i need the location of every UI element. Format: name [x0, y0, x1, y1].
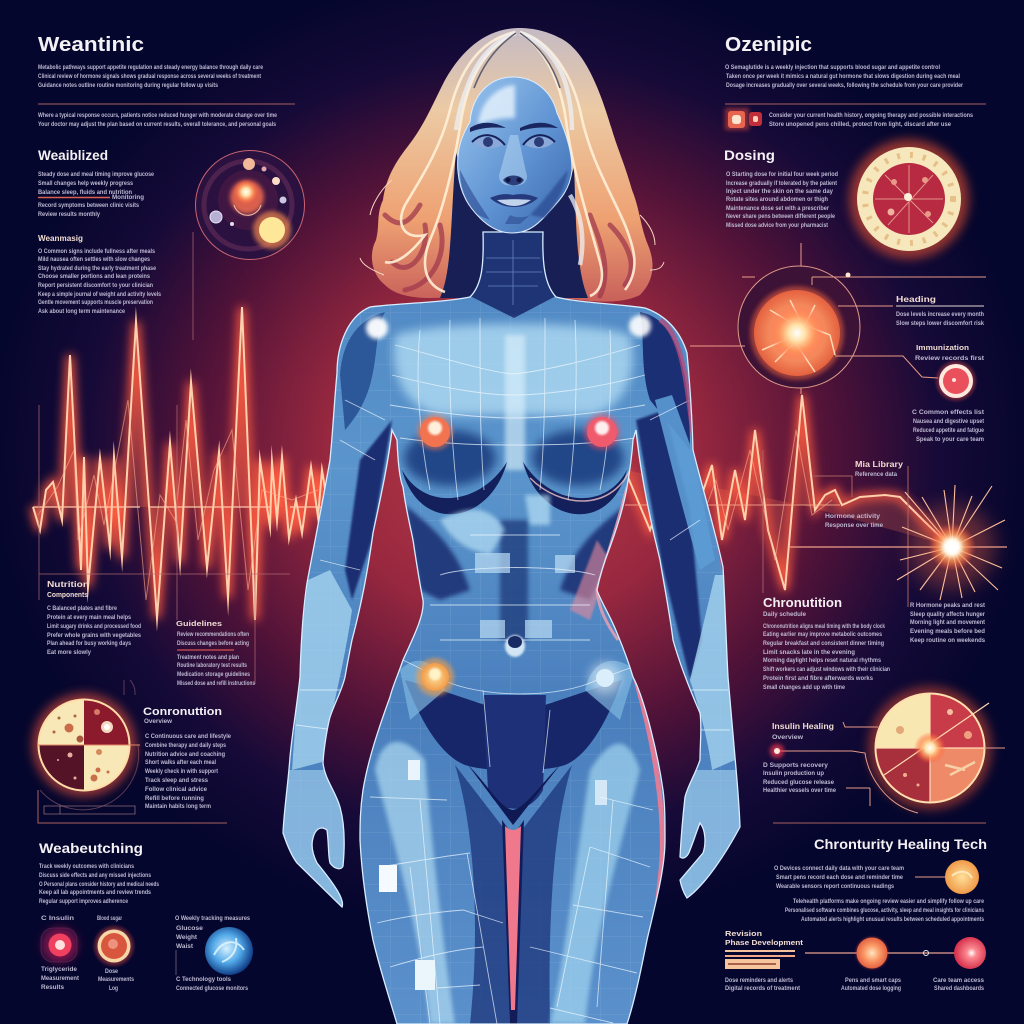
- text block: trace note: [825, 514, 884, 529]
- heading: heading label: Heading: [896, 295, 936, 304]
- text block: bottom notes: [725, 978, 985, 992]
- text block: weaiblized: [38, 172, 155, 218]
- heading: weabeutching: Weabeutching: [39, 840, 143, 856]
- text block: dosing: [726, 172, 838, 229]
- panel: healing tech: [725, 823, 987, 992]
- text block: guidelines: Routine laboratory test results: [177, 663, 248, 669]
- text block: weanmasig: [38, 249, 162, 315]
- text block: insulin healing: D Supports recovery: [763, 763, 829, 769]
- light waist area: [400, 661, 445, 720]
- text block: weaiblized: Small changes help weekly progress: [38, 181, 134, 187]
- sub-heading: conronuttion: Overview: [144, 719, 172, 725]
- leg shading: [455, 765, 510, 1024]
- text block: chronutition: Small changes add up with time: [763, 685, 846, 691]
- head: [458, 77, 572, 233]
- progress bar: [725, 950, 795, 969]
- text block: dosing: Rotate sites around abdomen or thigh: [726, 197, 828, 203]
- text block: nutrition: Prefer whole grains with vegetables: [47, 633, 142, 639]
- text block: weaiblized: Balance sleep, fluids and nutrition: [38, 190, 132, 196]
- small text under markers: Triglyceride: [41, 967, 78, 973]
- text block: conronuttion: Weekly check in with support: [145, 769, 218, 775]
- small text under markers: Measurement: [41, 976, 79, 982]
- heading: revision: Revision: [725, 931, 762, 938]
- text block: dosing: Missed dose advice from your pharmacist: [726, 223, 828, 229]
- icon: quartered nutrition disc: [32, 680, 140, 814]
- text block: chronutition: Limit snacks late in the evening: [763, 650, 855, 656]
- text block: insulin healing: Insulin production up: [763, 771, 824, 777]
- label row: [41, 916, 251, 922]
- intro text: Your doctor may adjust the plan based on current results, overall tolerance, and personal goals: [38, 122, 277, 128]
- text block: weanmasig: Report persistent discomfort to your clinician: [38, 283, 153, 289]
- grid accents: [296, 318, 730, 1024]
- text block: heading label: Dose levels increase every month: [896, 312, 984, 318]
- text block: weanmasig: O Common signs include fullness after meals: [38, 249, 156, 255]
- small text under markers: C Technology tools: [176, 977, 232, 983]
- neck shading: [470, 232, 556, 318]
- text block: dosing: Inject under the skin on the same day: [726, 189, 834, 195]
- text block: weanmasig: Ask about long term maintenance: [38, 309, 126, 315]
- text block: tech summary: [785, 899, 985, 923]
- text block: conronuttion: Nutrition advice and coaching: [145, 752, 225, 758]
- text block: tech summary: Telehealth platforms make ongoing review easier and simplify follow up care: [793, 899, 985, 905]
- text block: marker note: Reduced appetite and fatigue: [913, 428, 985, 434]
- intro text: Dosage increases gradually over several weeks, following the schedule from your care provider: [726, 83, 964, 89]
- small text under markers: Weight: [176, 935, 197, 941]
- intro text: [725, 65, 986, 104]
- heading: nutrition label: Nutrition: [47, 580, 89, 589]
- text block: rhythm note: Evening meals before bed: [910, 629, 985, 635]
- text block: conronuttion: Track sleep and stress: [145, 778, 209, 784]
- text block: weabeutching: Track weekly outcomes with clinicians: [39, 864, 135, 870]
- body silhouette: [283, 232, 740, 1024]
- panel: lower left text: [47, 580, 256, 687]
- text block: guidelines: Discuss changes before acting: [177, 641, 249, 647]
- text block: mia library: Reference data: [855, 472, 898, 478]
- heading: immunization label: Immunization: [916, 345, 969, 352]
- text block: tech summary: Automated alerts highlight unusual results between scheduled appointments: [801, 917, 985, 923]
- text block: weabeutching: Keep all lab appointments and review trends: [39, 890, 152, 896]
- text block: weanmasig: Gentle movement supports muscle preservation: [38, 300, 153, 306]
- text block: weabeutching: Regular support improves adherence: [39, 899, 129, 905]
- icon: quartered healing disc: [777, 686, 1005, 813]
- text block: nutrition: C Balanced plates and fibre: [47, 606, 118, 612]
- text block: chronutition: Chrononutrition aligns meal timing with the body clock: [763, 624, 886, 630]
- chest lower shading: [404, 430, 496, 486]
- text block: chronutition: Regular breakfast and consistent dinner timing: [763, 641, 884, 647]
- text block: weabeutching: Discuss side effects and any missed injections: [39, 873, 152, 879]
- figure: holographic human mannequin: [280, 28, 750, 1024]
- text block: dosing: Increase gradually if tolerated by the patient: [726, 181, 837, 187]
- sub-heading: revision: Phase Development: [725, 940, 804, 947]
- label row: Blood sugar: [97, 916, 122, 922]
- text block: conronuttion: [145, 734, 232, 810]
- icon: orange marker: [92, 924, 136, 968]
- intro text: Clinical review of hormone signals shows gradual response across several weeks of treatment: [38, 74, 261, 80]
- connector line with sphere markers: [805, 935, 986, 971]
- eyes and brows: [470, 123, 558, 148]
- text block: healing tech: Smart pens record each dose and reminder time: [776, 875, 904, 881]
- intro text: Taken once per week it mimics a natural gut hormone that slows digestion during each meal: [726, 74, 960, 80]
- text block: nutrition: Eat more slowly: [47, 650, 92, 656]
- text block: nutrition: [47, 606, 142, 656]
- text block: marker note: Nausea and digestive upset: [913, 419, 984, 425]
- intro text: [38, 65, 295, 128]
- icon: red pointer dot: [770, 744, 784, 758]
- text block: conronuttion: Combine therapy and daily steps: [145, 743, 227, 749]
- lips: [490, 194, 538, 207]
- text block: chronutition: Protein first and fibre afterwards works: [763, 676, 874, 682]
- text block: weaiblized: Steady dose and meal timing improve glucose: [38, 172, 155, 178]
- text block: weaiblized: Monitoring: [112, 195, 144, 201]
- text block: chronutition: Shift workers can adjust windows with their clinician: [763, 667, 890, 673]
- label row: C Insulin: [41, 916, 74, 922]
- text block: heading label: Slow steps lower discomfort risk: [896, 321, 985, 327]
- text block: insulin healing: [763, 763, 837, 794]
- upper chest highlight: [394, 324, 633, 415]
- indicator text: Store unopened pens chilled, protect from light, discard after use: [769, 122, 952, 128]
- icon: blue sphere: [205, 927, 253, 975]
- text block: trace note: Response over time: [825, 523, 884, 529]
- icon: gold sphere: [915, 860, 979, 894]
- ecg waveform chart: [33, 307, 950, 620]
- text block: weabeutching: O Personal plans consider history and medical needs: [39, 882, 160, 888]
- text block: bottom notes: Care team access: [933, 978, 985, 984]
- text block: rhythm note: Sleep quality affects hunger: [910, 612, 986, 618]
- text block: marker note: C Common effects list: [912, 410, 984, 416]
- small text under markers: Results: [41, 985, 65, 991]
- text block: healing tech: O Devices connect daily data with your care team: [774, 866, 904, 872]
- text block: bottom notes: Digital records of treatment: [725, 986, 800, 992]
- sub-heading: chronutition: Daily schedule: [763, 612, 807, 618]
- icon: glowing cell diagram: [690, 243, 986, 394]
- text block: dosing: Maintenance dose set with a prescriber: [726, 206, 830, 212]
- text block: insulin healing: Reduced glucose release: [763, 780, 835, 786]
- hip panel shading: [405, 680, 622, 770]
- panel: weabeutching: [39, 840, 253, 992]
- dividing axes: [39, 232, 290, 684]
- text block: weaiblized: Review results monthly: [38, 212, 101, 218]
- icon: dosing disc: [849, 139, 969, 259]
- panel: chronutition: [763, 596, 986, 691]
- text block: heading label: [896, 312, 985, 327]
- text block: conronuttion: Refill before running: [145, 796, 204, 802]
- small text under markers: Glucose: [176, 926, 204, 932]
- text block: rhythm note: Keep routine on weekends: [910, 638, 986, 644]
- text block: conronuttion: Short walks after each meal: [145, 760, 216, 766]
- arm shading: [345, 420, 392, 600]
- shoulder shading and highlights: [340, 312, 385, 430]
- intro text: Where a typical response occurs, patients notice reduced hunger with moderate change over time: [38, 113, 278, 119]
- icon: red marker: [41, 928, 77, 962]
- text block: marker note: [912, 410, 985, 443]
- heading: mia library: Mia Library: [855, 460, 904, 469]
- heading: guidelines: Guidelines: [176, 619, 222, 628]
- small text under markers: Measurements: [98, 977, 135, 983]
- text block: marker note: Speak to your care team: [916, 437, 984, 443]
- text block: weanmasig: Choose smaller portions and lean proteins: [38, 274, 151, 280]
- small text under markers: Dose: [105, 969, 119, 975]
- text block: rhythm note: [910, 603, 986, 644]
- icon: glowing indicator squares: [725, 108, 762, 130]
- text block: conronuttion: Follow clinical advice: [145, 787, 208, 793]
- face shading: [460, 85, 568, 224]
- slit between thighs: [502, 820, 524, 1024]
- text block: guidelines: Review recommendations often: [177, 632, 249, 638]
- text block: conronuttion: C Continuous care and lifestyle: [145, 734, 232, 740]
- panel: ozenipic: [724, 34, 986, 229]
- sub-heading: insulin healing: Overview: [772, 735, 803, 741]
- text block: insulin healing: Healthier vessels over time: [763, 788, 837, 794]
- icon: orbital cell diagram: [196, 150, 304, 260]
- text block: bottom notes: Shared dashboards: [934, 986, 985, 992]
- intro text: Metabolic pathways support appetite regulation and steady energy balance through daily care: [38, 65, 264, 71]
- text block: weaiblized: Record symptoms between clinic visits: [38, 203, 140, 209]
- heading: ozenipic: Ozenipic: [725, 34, 812, 56]
- text block: dosing: Never share pens between different people: [726, 214, 836, 220]
- text block: bottom notes: Automated dose logging: [841, 986, 901, 992]
- text block: weabeutching: [39, 864, 160, 905]
- heading: weanmasig: Weanmasig: [38, 233, 83, 243]
- panel: insulin healing: [763, 722, 837, 794]
- nose: [499, 135, 527, 185]
- icon: ringed marker: [934, 359, 978, 403]
- text block: chronutition: Morning daylight helps reset natural rhythms: [763, 658, 882, 664]
- indicator text: Consider your current health history, ongoing therapy and possible interactions: [769, 113, 974, 119]
- heading: dosing: Dosing: [724, 147, 775, 163]
- text block: chronutition: Eating earlier may improve metabolic outcomes: [763, 632, 883, 638]
- hair back: [360, 28, 664, 302]
- heading: chronutition: Chronutition: [763, 596, 842, 610]
- heading: insulin healing: Insulin Healing: [772, 722, 834, 731]
- body wire grid: [280, 290, 750, 1024]
- text block: healing tech: Wearable sensors report continuous readings: [776, 884, 895, 890]
- heading: weaiblized: Weaiblized: [38, 147, 108, 163]
- text block: conronuttion: Maintain habits long term: [145, 804, 211, 810]
- label row: O Weekly tracking measures: [175, 916, 251, 922]
- text block: immunization label: Review records first: [915, 356, 984, 362]
- heading: conronuttion: Conronuttion: [143, 706, 222, 718]
- panel: conronuttion: [143, 706, 232, 810]
- body contour: [283, 232, 740, 1024]
- text block: nutrition: Plan ahead for busy working days: [47, 641, 132, 647]
- text block: weanmasig: Mild nausea often settles with slow changes: [38, 257, 151, 263]
- text block: trace note: Hormone activity: [825, 514, 881, 520]
- text block: bottom notes: Pens and smart caps: [845, 978, 902, 984]
- text block: dosing: O Starting dose for initial four week period: [726, 172, 838, 178]
- text block: guidelines: Treatment notes and plan: [177, 655, 239, 661]
- text block: bottom notes: Dose reminders and alerts: [725, 978, 794, 984]
- intro text: O Semaglutide is a weekly injection that supports blood sugar and appetite control: [725, 65, 940, 71]
- text block: weanmasig: Stay hydrated during the early treatment phase: [38, 266, 157, 272]
- panel: callouts right: [812, 295, 985, 607]
- icon: starburst: [790, 485, 1007, 600]
- small text under markers: Waist: [176, 944, 193, 950]
- text block: rhythm note: R Hormone peaks and rest: [910, 603, 985, 609]
- text block: healing tech: [774, 866, 904, 890]
- text block: guidelines: [177, 632, 256, 687]
- heading: weantinic: Weantinic: [38, 34, 144, 56]
- text block: nutrition: Limit sugary drinks and processed food: [47, 624, 141, 630]
- panel: left column: [38, 34, 295, 315]
- text block: chronutition: [763, 624, 890, 691]
- text block: guidelines: Missed dose and refill instructions: [177, 681, 256, 687]
- pink rim: [632, 676, 664, 907]
- heading: healing tech: Chronturity Healing Tech: [814, 836, 987, 852]
- text block: guidelines: Medication storage guidelines: [177, 672, 251, 678]
- text block: weanmasig: Keep a simple journal of weight and activity levels: [38, 292, 162, 298]
- text block: rhythm note: Morning light and movement: [910, 620, 985, 626]
- sub-heading: nutrition: Components: [47, 592, 88, 599]
- small text under markers: Connected glucose monitors: [176, 986, 249, 992]
- intro text: Guidance notes outline routine monitoring during regular follow up visits: [38, 83, 219, 89]
- abdomen shading: [405, 505, 625, 600]
- marker nodes on body: [416, 414, 621, 696]
- indicator text: [769, 113, 974, 128]
- small text under markers: [41, 926, 249, 992]
- small text under markers: Log: [109, 986, 118, 992]
- text block: nutrition: Protein at every main meal helps: [47, 615, 132, 621]
